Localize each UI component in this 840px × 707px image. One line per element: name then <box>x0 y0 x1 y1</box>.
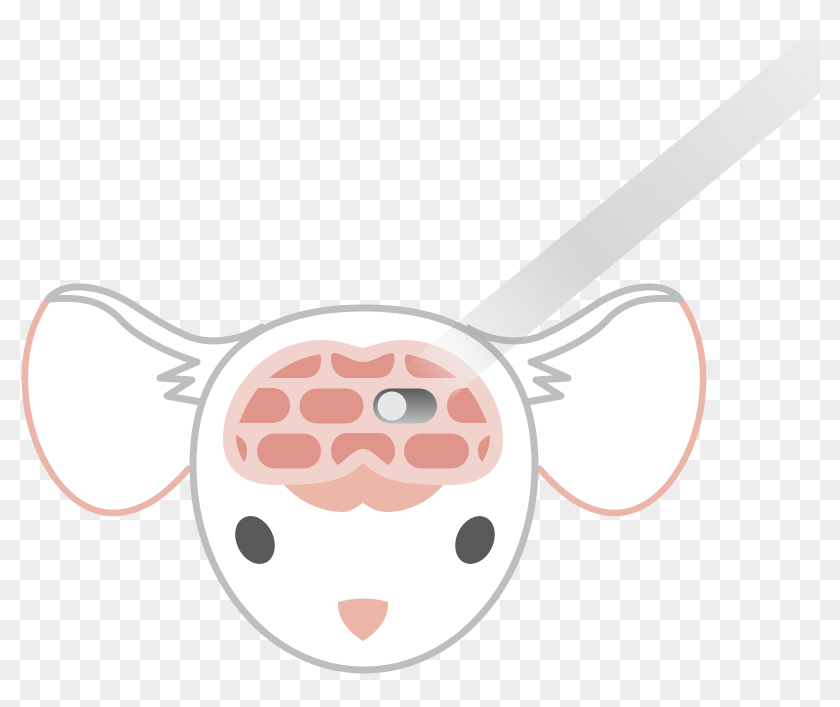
outlines seen through the bar <box>452 322 526 360</box>
left ear <box>25 287 262 513</box>
cerebellum <box>280 445 447 512</box>
brain outer shape <box>223 340 503 485</box>
right eye <box>448 510 502 570</box>
optical fibre bar <box>385 40 820 410</box>
right ear <box>466 287 703 513</box>
left eye <box>228 510 282 570</box>
brain tissue patches <box>236 353 490 468</box>
nose <box>338 598 388 641</box>
head outline <box>193 308 535 670</box>
brain <box>223 340 503 485</box>
implant window <box>373 388 437 424</box>
